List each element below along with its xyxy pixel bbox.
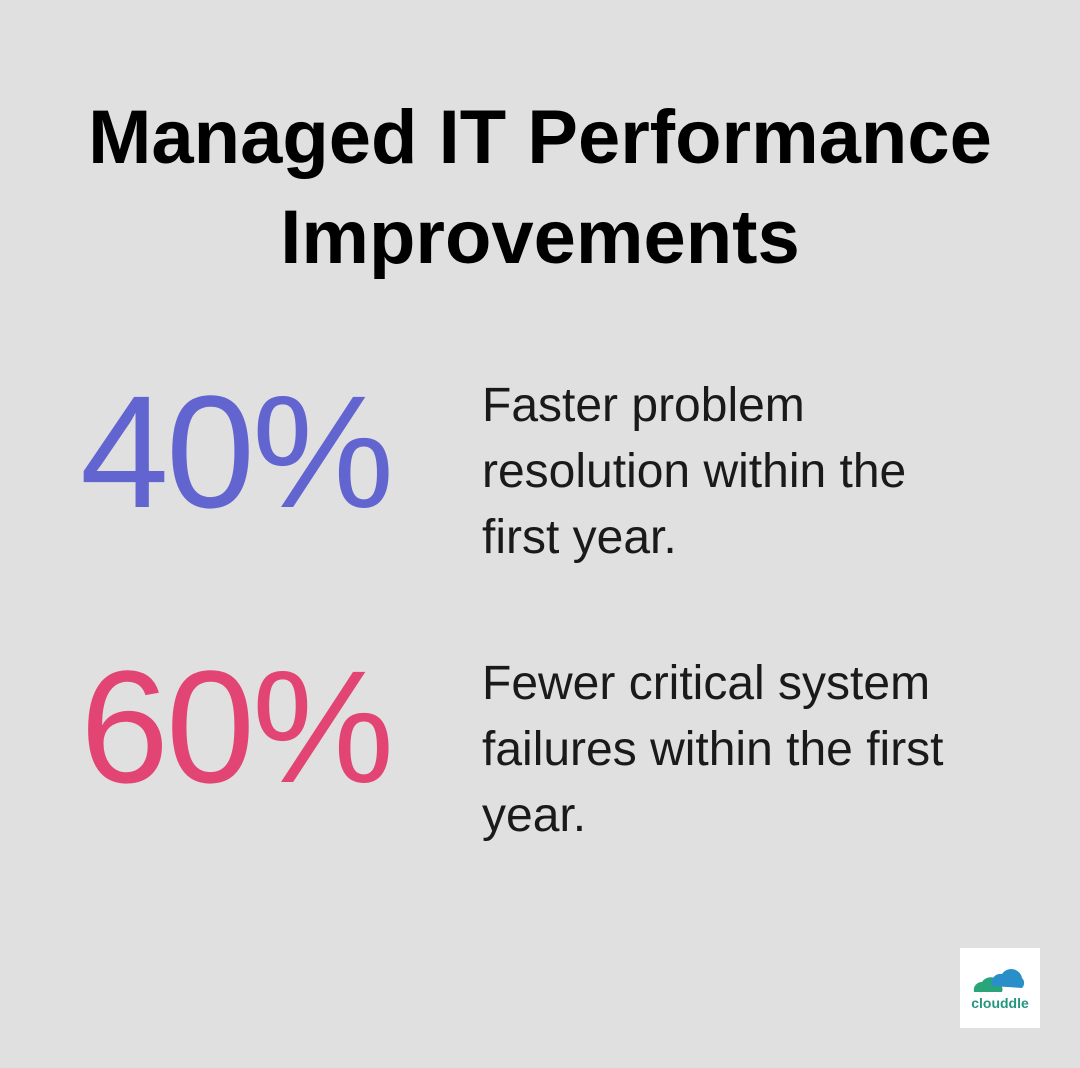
- stat 2 number: 60%: [80, 637, 391, 816]
- stat 2 text: failures within the first: [482, 723, 944, 776]
- stat 1 text: resolution within the: [482, 445, 906, 498]
- logo: [960, 948, 1040, 1028]
- logo: clouddle: [971, 995, 1029, 1011]
- title: Managed IT Performance: [88, 95, 992, 180]
- stat 2 text: [482, 657, 944, 842]
- stat 1 text: first year.: [482, 511, 677, 564]
- title: Improvements: [280, 195, 800, 280]
- stat 1 text: [482, 379, 906, 564]
- title: [88, 95, 992, 280]
- stat 2 text: year.: [482, 789, 586, 842]
- stat 2 text: Fewer critical system: [482, 657, 930, 710]
- stat 1 text: Faster problem: [482, 379, 805, 432]
- stat 1 number: 40%: [80, 362, 391, 541]
